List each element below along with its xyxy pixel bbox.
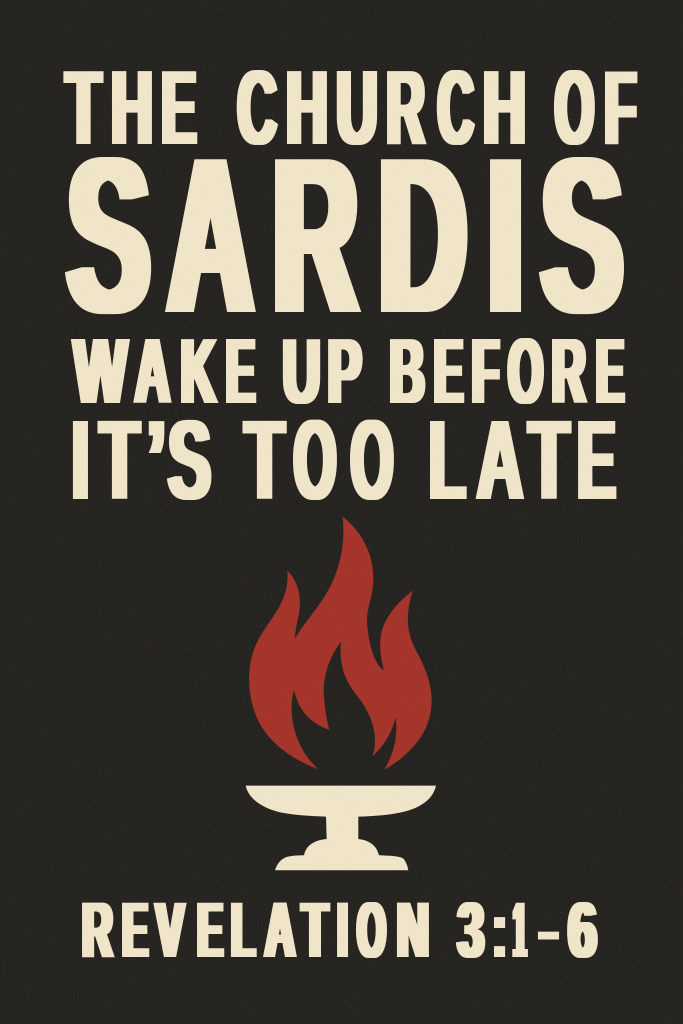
title line: the church of: O xyxy=(555,49,594,167)
title line: the church of: H xyxy=(483,49,526,167)
subtitle line: it's too late: E xyxy=(577,397,616,523)
subtitle line: wake up before: A xyxy=(135,319,170,423)
title line: the church of: R xyxy=(386,49,425,167)
subtitle line: wake up before: R xyxy=(552,319,586,423)
reference line: revelation 3:1-6: V xyxy=(156,886,184,974)
subtitle line: wake up before: E xyxy=(434,319,463,423)
title: sardis: D xyxy=(379,112,467,360)
subtitle line: it's too late: S xyxy=(168,397,211,523)
reference line: revelation 3:1-6: O xyxy=(358,886,386,974)
reference line: revelation 3:1-6: : xyxy=(494,886,506,974)
subtitle line: it's too late: T xyxy=(529,397,569,523)
reference line: revelation 3:1-6: N xyxy=(397,886,429,974)
title: sardis: S xyxy=(67,112,150,360)
title line: the church of: T xyxy=(66,49,101,167)
subtitle line: wake up before: U xyxy=(283,319,320,423)
title line: the church of: H xyxy=(286,49,328,167)
subtitle line: wake up before: B xyxy=(390,319,425,423)
reference line: revelation 3:1-6: 1 xyxy=(514,886,526,974)
subtitle line: wake up before: F xyxy=(472,319,499,423)
title: sardis: R xyxy=(273,112,358,360)
title line: the church of: C xyxy=(238,49,277,167)
subtitle line: it's too late: L xyxy=(429,397,466,523)
reference line: revelation 3:1-6: R xyxy=(82,886,113,974)
reference line: revelation 3:1-6: 6 xyxy=(568,886,597,974)
title line: the church of: H xyxy=(111,49,153,167)
reference line: revelation 3:1-6: E xyxy=(122,886,148,974)
reference line: revelation 3:1-6: T xyxy=(302,886,328,974)
subtitle line: it's too late: ’ xyxy=(147,397,166,523)
subtitle line: it's too late: T xyxy=(100,397,139,523)
reference line: revelation 3:1-6: A xyxy=(265,886,295,974)
title: sardis: I xyxy=(487,112,524,360)
reference line: revelation 3:1-6: 3 xyxy=(458,886,484,974)
icon: cream bowl on pedestal xyxy=(246,786,436,870)
reference line: revelation 3:1-6: I xyxy=(338,886,347,974)
subtitle line: it's too late: O xyxy=(294,397,336,523)
subtitle line: wake up before: W xyxy=(74,319,127,423)
reference line: revelation 3:1-6: L xyxy=(231,886,255,974)
title line: the church of: U xyxy=(336,49,378,167)
subtitle line: it's too late: A xyxy=(477,397,523,523)
subtitle line: it's too late: T xyxy=(245,397,284,523)
subtitle line: it's too late: O xyxy=(351,397,393,523)
subtitle line: wake up before: P xyxy=(328,319,360,423)
title line: the church of: C xyxy=(438,49,474,167)
icon: red flame xyxy=(249,517,432,769)
title line: the church of: E xyxy=(162,49,196,167)
poster: F xyxy=(604,49,636,167)
subtitle line: wake up before: E xyxy=(226,319,255,423)
reference line: revelation 3:1-6: E xyxy=(198,886,223,974)
subtitle line: it's too late: I xyxy=(72,397,89,523)
poster: E xyxy=(596,319,624,423)
subtitle line: wake up before: K xyxy=(181,319,216,423)
title: sardis: A xyxy=(168,112,253,360)
subtitle line: wake up before: O xyxy=(508,319,543,423)
icon: flame and bowl xyxy=(246,517,436,870)
reference line: revelation 3:1-6: – xyxy=(540,886,557,974)
